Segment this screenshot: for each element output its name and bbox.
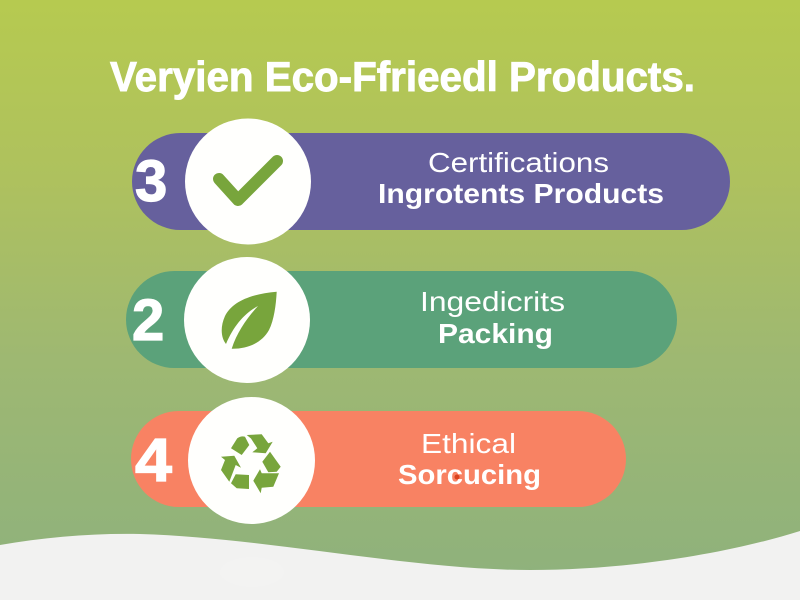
artifact: red speck <box>454 474 460 480</box>
text: ingredients line 1: Ingedicrits <box>420 286 565 317</box>
faint ghost mark on wave <box>220 557 284 587</box>
text: certifications line 2: Ingrotents Products <box>378 178 664 209</box>
number 2: 2 <box>132 288 164 353</box>
icon: recycle <box>221 434 281 493</box>
pill: ingredients <box>126 271 677 368</box>
panel: ingredients <box>126 257 677 383</box>
icon: leaf <box>222 292 277 349</box>
icon circle: check <box>185 118 311 244</box>
pill: ethical sourcing <box>131 411 626 507</box>
title: Veryien Eco-Ffrieedl Products. <box>110 53 695 100</box>
bottom wave <box>0 531 800 600</box>
text: certifications line 1: Certifications <box>428 147 609 178</box>
icon circle: recycle <box>188 397 315 524</box>
icon: check mark <box>219 161 277 200</box>
pill: certifications <box>132 133 730 230</box>
text: ethical line 1: Ethical <box>421 428 516 459</box>
text: ingredients line 2: Packing <box>438 318 553 349</box>
panel: ethical sourcing <box>131 397 626 524</box>
text: ethical line 2: Sorcucing <box>398 459 541 490</box>
icon circle: leaf <box>184 257 310 383</box>
number 3: 3 <box>135 149 167 214</box>
panel: certifications <box>132 118 730 244</box>
number 4: 4 <box>135 426 172 494</box>
